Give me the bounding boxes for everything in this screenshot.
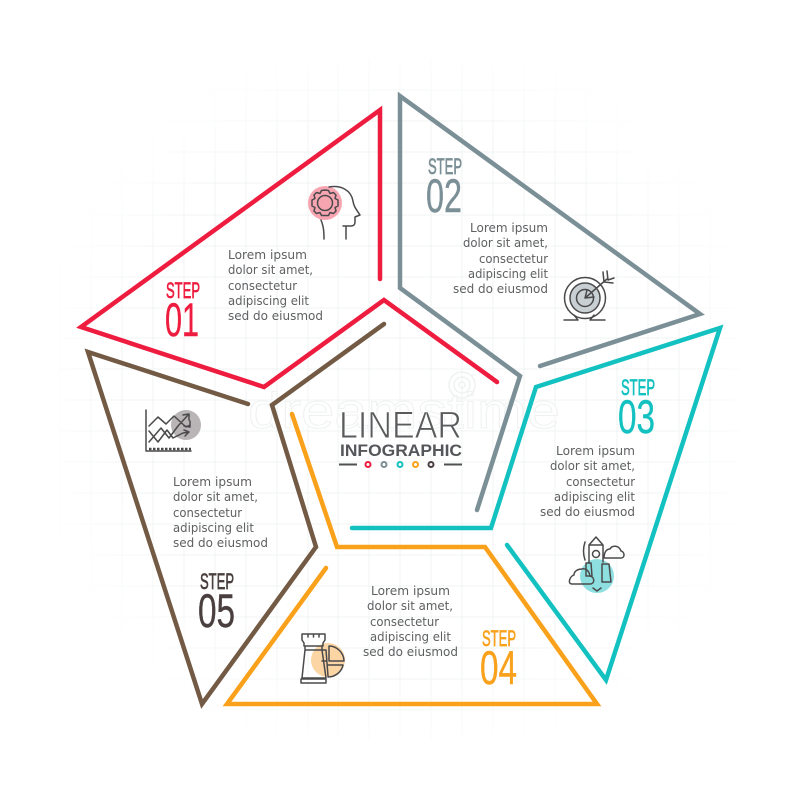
- step 2 text: adipiscing elit: [468, 266, 548, 281]
- panel: step 1 outline: [81, 110, 497, 387]
- step 1 text: sed do eiusmod: [228, 308, 323, 323]
- step 5 label: STEP: [200, 569, 234, 594]
- step 3 label: 03: [618, 390, 655, 443]
- step 3 text: Lorem ipsum: [556, 443, 635, 458]
- step 4 label: 04: [480, 641, 517, 694]
- step 4 text: adipiscing elit: [370, 629, 451, 644]
- step 3 text: consectetur: [566, 474, 636, 489]
- icon: head with gear: [308, 186, 360, 239]
- step 2 label: [426, 154, 462, 222]
- step 1 label: 01: [165, 293, 199, 346]
- step 5 label: [198, 569, 235, 637]
- watermark: dreamstime: [248, 383, 560, 439]
- step 4 text: consectetur: [370, 614, 440, 629]
- step 1 text: dolor sit amet,: [228, 262, 313, 277]
- step 2 text: consectetur: [479, 251, 549, 266]
- step 2 text: [453, 220, 549, 296]
- step 2 label: 02: [426, 169, 462, 222]
- step 5 text: Lorem ipsum: [173, 474, 252, 489]
- step 2 text: dolor sit amet,: [463, 235, 548, 250]
- step 4 text: sed do eiusmod: [363, 644, 458, 659]
- panel: step 4 outline: [227, 414, 597, 704]
- step 1 label: [165, 278, 200, 346]
- step 4 text: dolor sit amet,: [367, 598, 453, 613]
- panel: step 3 outline: [352, 328, 720, 680]
- icon: chess rook with pie: [301, 634, 345, 683]
- step 4 label: STEP: [482, 626, 516, 651]
- title: LINEAR: [339, 405, 462, 447]
- step 5 text: consectetur: [173, 505, 243, 520]
- icon: rocket with clouds: [569, 537, 624, 593]
- step 2 text: sed do eiusmod: [453, 281, 548, 296]
- step 2 label: STEP: [428, 154, 462, 179]
- title: INFOGRAPHIC: [340, 441, 462, 460]
- step 5 text: dolor sit amet,: [173, 489, 258, 504]
- panel: step 2 outline: [400, 96, 700, 510]
- step 3 label: STEP: [621, 375, 655, 400]
- step 5 text: sed do eiusmod: [173, 535, 268, 550]
- step 4 text: Lorem ipsum: [371, 583, 450, 598]
- title decoration dots: [339, 462, 462, 467]
- step 4 label: [480, 626, 517, 694]
- step 1 text: consectetur: [228, 278, 298, 293]
- step 3 text: [540, 443, 636, 519]
- step 3 label: [618, 375, 655, 443]
- watermark: [248, 372, 560, 439]
- step 5 text: adipiscing elit: [173, 520, 254, 535]
- step 1 text: Lorem ipsum: [228, 247, 307, 262]
- panel: step 5 outline: [88, 324, 384, 704]
- step 3 text: adipiscing elit: [554, 489, 635, 504]
- step 3 text: dolor sit amet,: [550, 458, 635, 473]
- icon: target with arrow: [564, 271, 614, 320]
- step 3 text: sed do eiusmod: [540, 504, 635, 519]
- step 1 text: [228, 247, 323, 323]
- step 4 text: [363, 583, 458, 659]
- step 5 label: 05: [198, 584, 235, 637]
- step 1 label: STEP: [166, 278, 200, 303]
- step 5 text: [173, 474, 268, 550]
- icon: line chart with arrows: [146, 410, 201, 451]
- step 1 text: adipiscing elit: [228, 293, 309, 308]
- step 2 text: Lorem ipsum: [470, 220, 548, 235]
